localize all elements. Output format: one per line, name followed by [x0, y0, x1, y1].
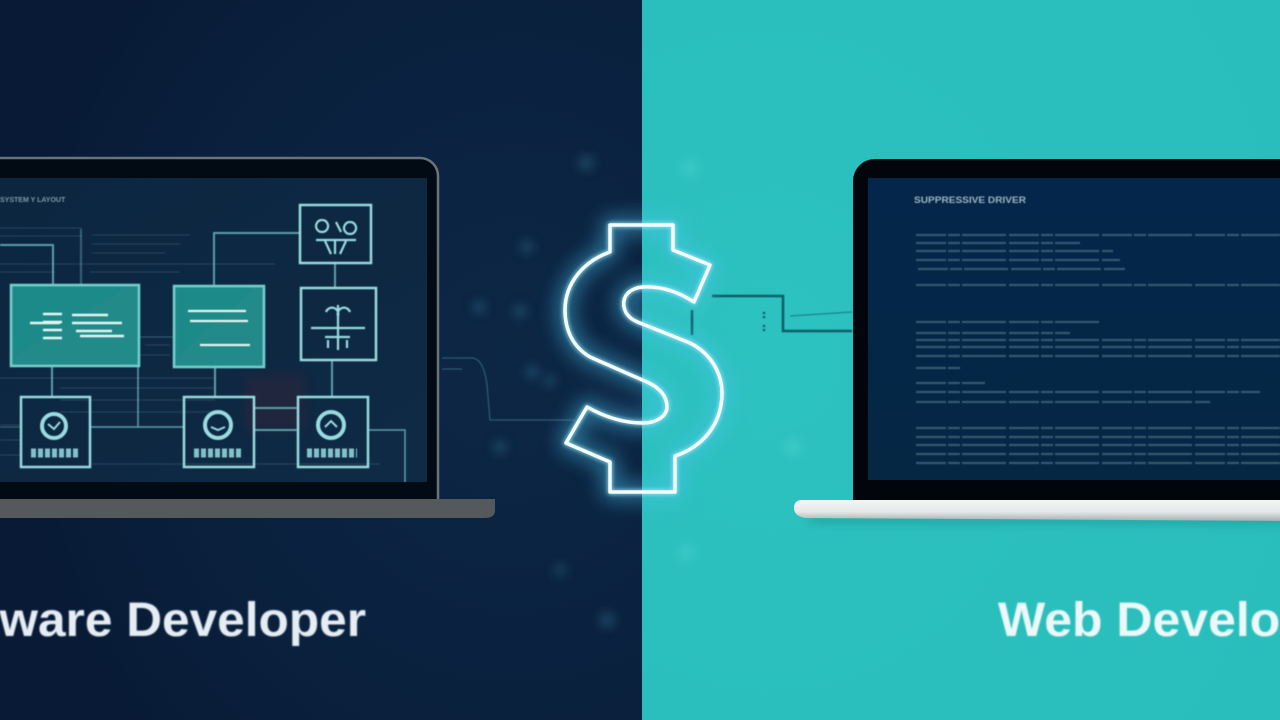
panel: web developer background: [642, 0, 1280, 720]
laptop lid: [853, 159, 1280, 500]
icon box: bottom middle: [184, 397, 254, 467]
screen heading: SUPPRESSIVE DRIVER: [914, 195, 1027, 205]
laptop base: [0, 499, 495, 518]
laptop lid rim: [0, 158, 438, 499]
icon box: tree middle right: [301, 288, 376, 360]
base shadow: [810, 516, 1280, 523]
icon box: bottom right: [298, 397, 368, 467]
laptop screen: [0, 178, 427, 482]
icon box: network top right: [300, 205, 371, 263]
laptop: web developer: [794, 159, 1280, 523]
connector lines: [0, 229, 405, 482]
circuit line: left laptop to dollar: [442, 358, 575, 420]
dollar outline: [565, 225, 722, 492]
code text lines: [916, 235, 1280, 463]
teal module 2: [174, 286, 264, 367]
icon: glowing dollar sign: [565, 225, 722, 492]
teal module 1: [11, 285, 139, 366]
icon box: bottom left: [21, 397, 90, 467]
laptop lid: [0, 158, 438, 499]
laptop: software developer: [0, 158, 495, 518]
circuit line: dollar to right laptop: [692, 296, 852, 335]
faint code lines: [0, 228, 380, 464]
laptop screen: [868, 178, 1280, 480]
background glow dots: [472, 155, 801, 628]
panel: software developer background: [0, 0, 642, 720]
laptop base: [794, 500, 1280, 521]
dollar outer glow: [565, 225, 722, 492]
screen heading: SYSTEM Y LAYOUT: [0, 197, 66, 204]
dollar inner glow: [565, 225, 722, 492]
faint red glow on screen: [245, 375, 305, 430]
